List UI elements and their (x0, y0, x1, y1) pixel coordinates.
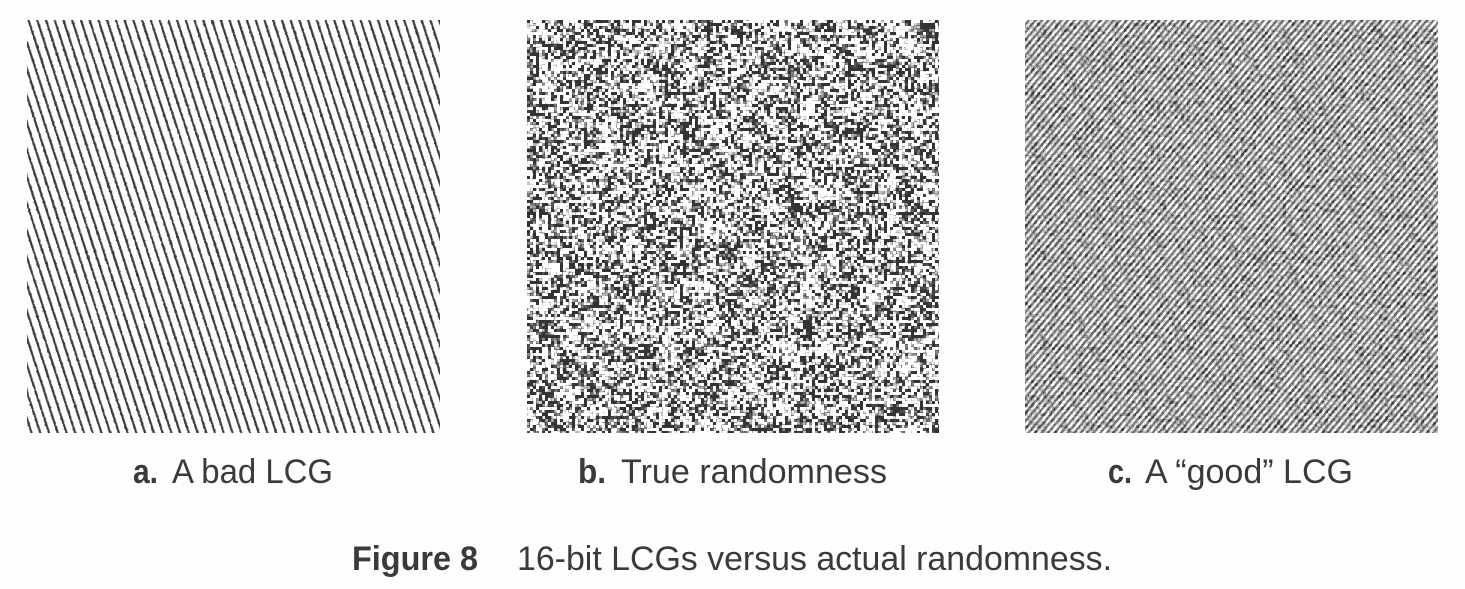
panel b: true randomness noise (521, 14, 945, 439)
label a: A bad LCG (172, 453, 333, 491)
label b: True randomness (621, 453, 887, 491)
label c: A “good” LCG (1145, 453, 1353, 491)
panel a: bad LCG diagonal lines (20, 14, 446, 439)
label b: b. (578, 453, 606, 491)
figure caption: 16-bit LCGs versus actual randomness. (517, 540, 1112, 578)
figure caption: Figure 8 (352, 540, 478, 578)
label c: c. (1108, 453, 1132, 491)
panel c: good LCG textured noise (1019, 14, 1444, 439)
label a: a. (133, 453, 158, 491)
